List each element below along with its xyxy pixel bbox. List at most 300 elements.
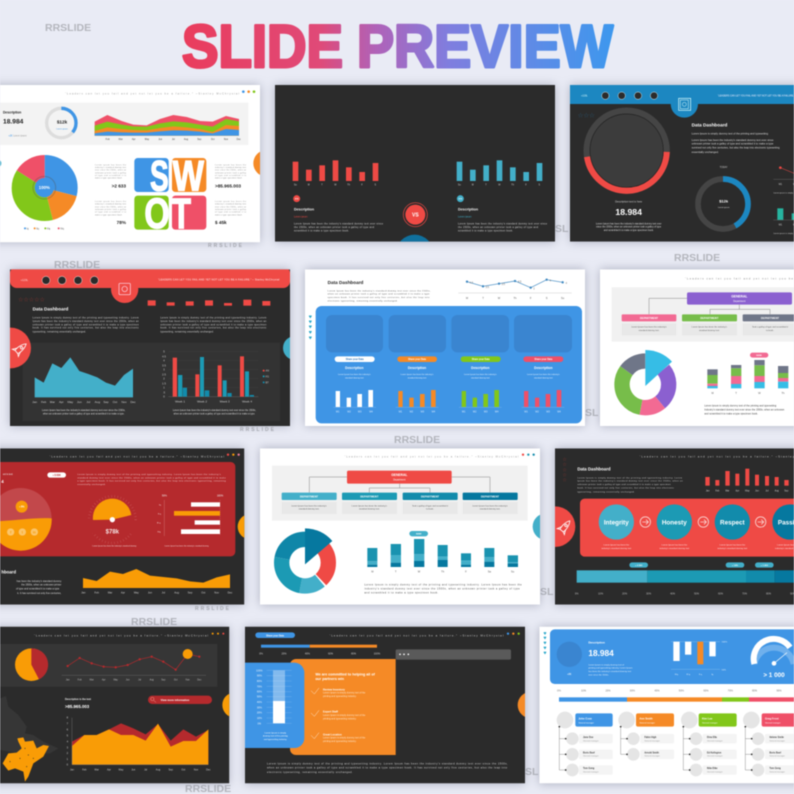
icon: hearts: ♥ <box>543 650 547 656</box>
percent bar: 40% <box>654 690 660 693</box>
percent bar <box>557 690 794 702</box>
blue panel: W1 <box>399 412 403 414</box>
org chart: standard dummy text. <box>639 329 660 332</box>
blue thermometer panel: 10% <box>257 717 263 720</box>
layered area chart: 0 <box>67 763 69 767</box>
panel: slide 6 purple org chart <box>600 269 794 426</box>
panel: slide 3 blue data dashboard: survived not only five centuries, but also the leap into electronic typesetting <box>692 145 780 149</box>
values panel: Respect <box>720 519 746 526</box>
icon: hearts: ♥ <box>543 640 547 646</box>
SWOT side text: industry's standard dummy text <box>215 203 247 206</box>
left description <box>293 195 384 233</box>
text columns: Ipsum has been the industry's standard dummy text ever since the 1500s, when an <box>33 320 139 323</box>
team tree lines <box>559 727 752 770</box>
VS badge <box>403 203 427 227</box>
panel: slide 9 values timeline: Ipsum has been the industry's standard dummy text ever since the 1500s, when an <box>577 480 683 483</box>
horizontal bar chart: III q <box>157 522 161 524</box>
small footer watermarks <box>195 243 276 612</box>
layered area chart: Jul <box>144 769 148 772</box>
gauge: > 1 000 <box>763 672 785 679</box>
watermarks: RRSLIDE <box>713 94 759 106</box>
button: view more: View more information <box>161 698 190 702</box>
gauge: Lorem Ipsum has been the industry's standard dummy <box>92 545 136 548</box>
team member cards: General manager <box>644 740 660 742</box>
stacked bars: M <box>371 570 373 574</box>
percent bar: 90% <box>776 690 782 693</box>
blue panel: standard dummy text <box>408 376 427 379</box>
panel: slide 1 SWOT dashboard: Description <box>3 110 21 114</box>
stacked bars <box>707 353 788 395</box>
bar chart: Apr <box>736 490 739 493</box>
pie chart: IIq <box>36 228 40 230</box>
blue thermometer panel: 0% <box>258 722 262 725</box>
org chart: DEPARTMENT <box>761 316 780 320</box>
blue panel: W2 <box>535 412 539 414</box>
area chart: Jul <box>86 400 91 404</box>
SWOT side text: ever since the 1500s, when an <box>215 169 246 172</box>
text columns: Lorem Ipsum is simply dummy text of the printing and typesetting industry. Lorem <box>33 316 139 319</box>
grouped bar chart: 5 <box>163 350 165 354</box>
team member cards: General manager <box>707 740 723 742</box>
panel: slide 1 SWOT dashboard: $ 45k <box>215 220 227 225</box>
org chart: DEPARTMENT <box>300 494 319 498</box>
red panel: + $ 83K <box>53 475 61 477</box>
blue thermometer panel: dummy text of the printing <box>263 735 289 738</box>
header bar: “LEADERS CAN LET YOU FAIL AND YET NOT LET YOU BE A FAILURE.” ~ Stanley McChrystal <box>158 279 280 282</box>
org chart: Took a galley of type and scrambled it <box>412 504 448 507</box>
bar chart: 50% <box>722 669 726 671</box>
small footer watermarks: RRSLIDE <box>208 243 244 249</box>
panel: slide 1 SWOT dashboard: >2 633 <box>112 183 126 188</box>
progress bar: 60% <box>328 653 334 656</box>
text columns: unknown printer took a galley of type and scrambled it to make a type specimen <box>33 323 139 326</box>
pie chart: 100% <box>39 185 50 190</box>
progress bar <box>259 645 381 656</box>
blue thermometer panel: 50% <box>257 696 263 699</box>
stacked bars: Su <box>511 570 515 574</box>
progress timeline: + 2.500 <box>635 565 643 567</box>
orange panel <box>290 659 396 755</box>
blue thermometer panel: 100% <box>256 669 263 672</box>
panel: slide 10 map dashboard: “Leaders can let you fail and yet not let you be a failure.” ~Stanley McChrystal <box>34 634 208 638</box>
team member cards: General manager <box>707 756 723 758</box>
line chart: 4 <box>566 283 568 285</box>
icon: stars: ☆ <box>562 457 567 463</box>
layered area chart: Nov <box>194 769 199 772</box>
blue panel: Lorem Ipsum has been the industry's <box>401 373 433 376</box>
SWOT tiles: S <box>150 152 169 200</box>
panel: slide 2 VS comparison <box>274 84 556 242</box>
SWOT side text: make a type specimen book <box>95 177 122 180</box>
line chart: Th <box>513 296 517 300</box>
icon: stars: ☆ <box>562 478 567 484</box>
team member cards: General manager <box>769 772 785 774</box>
orange panel: Great Location <box>323 732 342 736</box>
grouped bar chart: Week 4 <box>242 399 252 403</box>
area chart: Apr <box>59 400 64 404</box>
horizontal bar chart <box>157 495 224 548</box>
pie chart <box>15 648 48 681</box>
line chart: Apr <box>102 678 106 681</box>
red bar chart <box>293 160 378 187</box>
pie chart: Iq <box>27 228 29 230</box>
panel: slide 10 map dashboard <box>0 626 230 784</box>
area chart: May <box>67 400 74 404</box>
grouped bar chart: BT <box>266 382 269 384</box>
watermarks: SL <box>525 766 539 778</box>
left description: scrambled it to make a type specimen book. <box>294 230 349 233</box>
SWOT tiles: T <box>172 190 191 238</box>
org chart: DEPARTMENT <box>421 494 440 498</box>
left description: Lorem Ipsum has been the industry's standard dummy text ever since <box>294 223 384 226</box>
blue panel: W1 <box>336 412 340 414</box>
blue panel: standard dummy text <box>471 376 490 379</box>
team member cards: General manager <box>644 756 660 758</box>
progress timeline: 70% <box>742 593 748 596</box>
cyan bar chart: Th <box>511 185 515 187</box>
panel: slide 7 red gauge dashboard: hboard <box>1 569 16 574</box>
org chart: standard dummy text. <box>699 329 720 332</box>
team member cards <box>557 712 794 776</box>
panel: slide 9 values timeline: unknown printer took a galley of type and scrambled it to make a type specimen <box>577 483 671 486</box>
panel: slide 5 blue panel dashboard: Data Dashboard <box>328 280 364 285</box>
cyan bar chart: W <box>498 185 501 187</box>
panel: slide 5 blue panel dashboard: specimen book. It has survived not only five centuries, but also the leap into <box>328 296 430 299</box>
text columns: Ipsum has been the industry's standard dummy text ever since the 1500s, when an <box>160 320 267 323</box>
title: PREVIEW <box>357 13 613 80</box>
panel: slide 4 red data dashboard: ☆☆☆☆☆ <box>18 297 45 304</box>
area chart: Feb <box>41 400 47 404</box>
blue thermometer panel: 70% <box>257 685 263 688</box>
area chart: Dec <box>228 591 233 595</box>
panel: slide 7 red gauge dashboard: the 1500s, when an unknown printer <box>21 584 61 587</box>
donut chart <box>282 528 332 586</box>
progress bar: 0% <box>259 653 264 656</box>
mini bar charts <box>333 406 564 408</box>
top mini bars <box>148 300 270 306</box>
line chart: Feb <box>78 679 82 681</box>
horizontal bar chart: 100% <box>217 495 224 498</box>
line chart: Mar <box>90 678 94 681</box>
watermarks: SL <box>540 586 554 598</box>
panel: slide 9 values timeline: Lorem Ipsum is simply dummy text of the printing and typesetting industry. Lorem <box>577 476 682 479</box>
horizontal bar chart: Lorem Ipsum has been the industry's standard dummy <box>165 545 209 548</box>
area chart: Nov <box>214 591 220 595</box>
layered area chart: Oct <box>181 769 186 772</box>
line chart: 4 <box>550 280 552 282</box>
grouped bar chart: .5 <box>163 390 166 394</box>
grouped bar chart: 2 <box>163 377 165 381</box>
SWOT side text: industry's standard dummy text <box>95 166 127 169</box>
text columns: typesetting, remaining essentially unchanged. <box>160 330 214 333</box>
line chart: Nov <box>186 679 191 681</box>
panel: slide 12 team dashboard <box>539 626 794 784</box>
panel: slide 5 blue panel dashboard: electronic typesetting, remaining essentially unchanged. <box>328 299 398 302</box>
red bar chart: Th <box>347 185 351 187</box>
map of Canada <box>0 696 58 782</box>
red panel: standard dummy text ever since the 1500s, when an unknown printer took a galley of type and scrambled it to make <box>77 476 226 479</box>
area chart <box>32 357 136 416</box>
line chart <box>458 278 572 300</box>
bar chart: Mar <box>725 490 730 493</box>
line chart: 4.5 <box>518 282 522 284</box>
blue panel: W2 <box>473 412 477 414</box>
panel: slide 11 orange commitments: when an unknown printer took a galley of type and scrambled it to make a type specimen book. It has survived not only five centuries, but also the leap into <box>267 767 508 770</box>
right description: Lorem Ipsum has been the industry's standard dummy text ever since <box>458 223 548 226</box>
SWOT side text: make a type specimen book <box>215 213 242 216</box>
layered area chart: Aug <box>156 769 161 772</box>
small footer watermarks: RRSLIDE <box>240 427 276 433</box>
panel: slide 1 SWOT dashboard: “Leaders can let you fail and yet not let you be a failure.” ~Stanley McChrystal <box>65 92 239 96</box>
line chart: Dec <box>197 679 202 681</box>
percent bar: 70% <box>728 690 734 693</box>
icon: hearts <box>309 315 313 341</box>
blue thermometer panel: 80% <box>257 680 263 683</box>
blue header panel: +8K <box>567 674 572 676</box>
horizontal bar chart: 50% <box>162 495 168 498</box>
stacked area chart: Feb <box>106 139 110 141</box>
team member cards: General manager <box>765 722 781 724</box>
blue thermometer panel: 40% <box>257 701 263 704</box>
team member cards: General manager <box>769 756 785 758</box>
panel: slide 3 blue data dashboard: unknown printer took a galley of type and scrambled it to make a type <box>692 142 774 146</box>
browser bar <box>396 649 511 660</box>
icon: rocket <box>535 506 575 547</box>
panel: slide 9 values timeline: typesetting, remaining essentially unchanged. <box>577 490 635 493</box>
org chart: Department <box>733 300 746 303</box>
stacked bars: T <box>735 391 737 395</box>
header bar: +123L <box>581 95 588 97</box>
blue thermometer panel <box>245 663 304 748</box>
blue panel: W4 <box>432 412 436 414</box>
progress timeline <box>575 562 794 596</box>
SWOT side text: ever since the 1500s, when an <box>95 169 126 172</box>
bar chart: 100% <box>722 641 727 643</box>
layered area chart: 2 <box>67 751 69 755</box>
stacked bars: $45M <box>416 533 422 536</box>
SWOT side text: ever since the 1500s, when an <box>95 205 126 208</box>
progress timeline: 50% <box>694 593 700 596</box>
red panel: 4 <box>1 479 4 484</box>
pie with socials: in <box>33 530 36 534</box>
SWOT side text: make a type specimen book <box>95 213 122 216</box>
team member cards: Tom Geng <box>583 768 595 770</box>
org chart: GENERAL <box>391 473 407 477</box>
panel: slide 3 blue data dashboard: ☆☆☆ <box>578 112 595 119</box>
pie with socials: f <box>10 530 12 534</box>
team member cards: Dina Ella <box>707 737 718 739</box>
panel: slide 3 blue data dashboard: 18.984 <box>615 207 642 217</box>
org chart: GENERAL <box>731 295 747 299</box>
cyan bar chart: T <box>485 185 487 187</box>
panel: slide 11 orange commitments: electronic typesetting, remaining essentially unchanged. <box>267 771 353 774</box>
grouped bar chart: Week 1 <box>175 399 185 403</box>
org chart: Lorem Ipsum has been the industry's <box>352 504 387 507</box>
stacked bars <box>367 531 518 574</box>
watermarks: RRSLIDE <box>394 434 440 446</box>
percent bar: 60% <box>703 690 709 693</box>
panel: slide 8 teal org chart: and scrambled it to make a type specimen book. <box>364 591 439 594</box>
left description: the 1500s, when an unknown printer took a galley of type and <box>294 226 375 229</box>
cyan bar chart: F <box>525 185 527 187</box>
text columns: unknown printer took a galley of type and scrambled it to make a type specimen <box>160 323 267 326</box>
mini charts: Lorem ipsum is simply <box>773 193 793 195</box>
area chart: Oct <box>113 400 117 404</box>
blue panel: Share your Data <box>408 358 427 361</box>
text columns: Lorem Ipsum is simply dummy text of the printing and typesetting industry. Lorem <box>160 316 266 319</box>
blue thermometer panel: and typesetting industry. <box>264 738 287 741</box>
percent bar: 80% <box>752 690 758 693</box>
panel: slide 10 map dashboard: Description is the text <box>65 698 91 701</box>
blue panel: Lorem Ipsum has been the industry's <box>338 373 371 376</box>
bar chart: May <box>745 491 750 493</box>
layered area chart: 5 <box>67 733 69 737</box>
team member cards: Tom Geng <box>769 768 781 770</box>
bar chart: Sep <box>784 491 789 493</box>
layered area chart: May <box>119 769 124 772</box>
blue panel: W1 <box>462 412 466 414</box>
orange panel: our partners win <box>315 677 344 681</box>
grouped bar chart: AN <box>266 370 269 373</box>
orange panel: Lorem Ipsum is simply dummy text of the <box>323 714 366 717</box>
panel: slide 8 teal org chart: industry's standard dummy text ever since the 1500s, when an unknown printer took a galley of type <box>364 587 520 590</box>
area chart: Dec <box>130 400 136 404</box>
area chart: Mar <box>50 400 55 404</box>
team member cards: General manager <box>583 772 599 774</box>
percent bar: 0% <box>557 690 562 693</box>
cyan bar chart: S <box>539 185 541 187</box>
stacked bars: M <box>712 391 714 395</box>
stacked bars: W <box>758 391 761 395</box>
grouped bar chart: Week 2 <box>197 399 207 403</box>
team member cards: General manager <box>583 756 599 758</box>
panel: slide 11 orange commitments: Lorem Ipsum is simply dummy text of the printing and typesetting industry. Lorem Ipsum has been the industry's standard dummy text ever since the 1500s, <box>267 763 508 766</box>
red panel: a type specimen book. It has survived not only five centuries, but also the leap into electronic typesetting, remaining <box>77 480 226 483</box>
panel: slide 7 red gauge dashboard: k. It has survived not only five centuries, <box>17 592 62 595</box>
left description: Lorem ipsum <box>294 216 308 219</box>
layered area chart <box>67 716 211 772</box>
bar chart: Feb <box>715 491 720 493</box>
area chart: Jun <box>148 591 153 595</box>
SWOT side text: Lorem ipsum has been the <box>95 163 126 166</box>
icon: hearts: ♥ <box>309 325 313 331</box>
right description: scrambled it to make a type specimen book. <box>458 230 513 233</box>
donut: $12k: $12k <box>57 120 68 125</box>
icon: hearts: ♥ <box>543 631 547 637</box>
SWOT side text: unknown printer took a galley <box>215 208 246 211</box>
org chart: to book. <box>766 329 774 332</box>
red bar chart: W <box>334 185 337 187</box>
org chart <box>612 287 794 342</box>
donut: $12k: Lorem ipsum <box>56 127 68 130</box>
stacked area chart: Nov <box>224 139 229 141</box>
right description: the 1500s, when an unknown printer took a galley of type and <box>458 226 539 229</box>
blue thermometer panel: Lorem Ipsum is simply <box>265 731 287 734</box>
progress timeline: 20% <box>622 593 628 596</box>
org chart: Lorem Ipsum has been the industry's <box>631 326 667 329</box>
line chart: Jun <box>126 679 130 681</box>
donut: $12k <box>47 108 76 138</box>
title <box>182 13 613 80</box>
blue panel: Share your Data <box>346 358 364 361</box>
team member cards: Kim Lee <box>702 717 713 721</box>
orange panel: Lorem Ipsum is simply dummy text of the <box>323 692 366 695</box>
arrows <box>640 517 766 527</box>
progress timeline: + 1.000 <box>761 565 769 567</box>
watermarks: RRSLIDE <box>674 252 720 264</box>
panel: slide 8 teal org chart <box>260 448 541 605</box>
blue panel: W4 <box>369 412 373 414</box>
panel: slide 10 map dashboard: >85.965.003 <box>65 704 90 709</box>
org chart: standard dummy text. <box>359 508 380 511</box>
blue panel: W3 <box>421 412 425 414</box>
mini charts: Lorem ipsum is simply <box>773 233 793 235</box>
red bar chart: T <box>321 185 323 187</box>
values panel: industry's standard dummy text <box>717 547 748 550</box>
progress bar: 100% <box>374 653 381 656</box>
line chart: Jan <box>66 679 70 681</box>
line chart: Aug <box>150 678 154 681</box>
header bar <box>10 267 290 303</box>
panel: slide 3 blue data dashboard: Data Dashboard <box>692 123 728 128</box>
icon: hearts: ♥ <box>309 315 313 321</box>
layered area chart: Feb <box>82 769 87 772</box>
line chart: M <box>466 296 468 300</box>
values panel <box>580 499 794 557</box>
org chart: to book. <box>426 508 434 511</box>
area chart: Nov <box>121 400 127 404</box>
progress bar: 40% <box>305 653 311 656</box>
blue header panel: ever since the 1500s. <box>588 673 609 676</box>
text columns: book. It has survived not only five centuries, but also the leap into electronic <box>33 327 139 330</box>
panel: slide 3 blue data dashboard: since the 1500s, when an unknown printer took a galley of type <box>596 226 662 229</box>
area chart: Aug <box>174 591 180 595</box>
blue panel: W4 <box>495 412 499 414</box>
SWOT side text: unknown printer took a galley <box>215 171 246 174</box>
red panel: essentially unchanged. <box>77 483 106 486</box>
donut: today <box>698 179 748 229</box>
grouped bar chart: 3.5 <box>162 363 166 367</box>
area chart: Feb <box>94 591 99 595</box>
progress timeline: 40% <box>670 593 676 596</box>
orange panel: We are committed to helping all of <box>315 672 376 676</box>
gauge <box>754 639 794 679</box>
icon: stars: ☆ <box>562 462 567 468</box>
bar chart: Aug <box>775 490 779 493</box>
grouped bar chart: 0 <box>163 395 165 399</box>
panel: slide 4 red data dashboard <box>9 268 291 427</box>
layered area chart: 7 <box>67 722 69 726</box>
panel: slide 11 orange commitments: “Leaders can let you fail and yet not let you be a failure.” ~Stanley McChrystal <box>329 634 504 638</box>
progress timeline: 0% <box>575 593 579 596</box>
SWOT side text: Lorem ipsum has been the <box>95 200 126 203</box>
mini charts <box>773 166 794 235</box>
blue header panel: printing and typesetting industry. Lorem Ipsum <box>588 667 633 670</box>
grouped bar chart: FG <box>266 376 269 378</box>
area chart: Mar <box>108 591 112 595</box>
bar chart: Jul <box>766 491 769 493</box>
layered area chart: 6 <box>67 728 69 732</box>
small footer watermarks: RRSLIDE <box>195 606 231 612</box>
org chart: DEPARTMENT <box>481 494 499 498</box>
grouped bar chart: 4.5 <box>162 354 166 358</box>
org chart: standard dummy text. <box>480 508 501 511</box>
layered area chart: 1 <box>67 757 69 761</box>
layered area chart: Apr <box>107 769 111 772</box>
panel: slide 8 teal org chart: “Leaders can let you fail and yet not let you be a failure.” ~Stanley McChrystal <box>344 455 519 459</box>
bar chart: II q <box>699 674 703 676</box>
percent bar: 20% <box>605 690 611 693</box>
